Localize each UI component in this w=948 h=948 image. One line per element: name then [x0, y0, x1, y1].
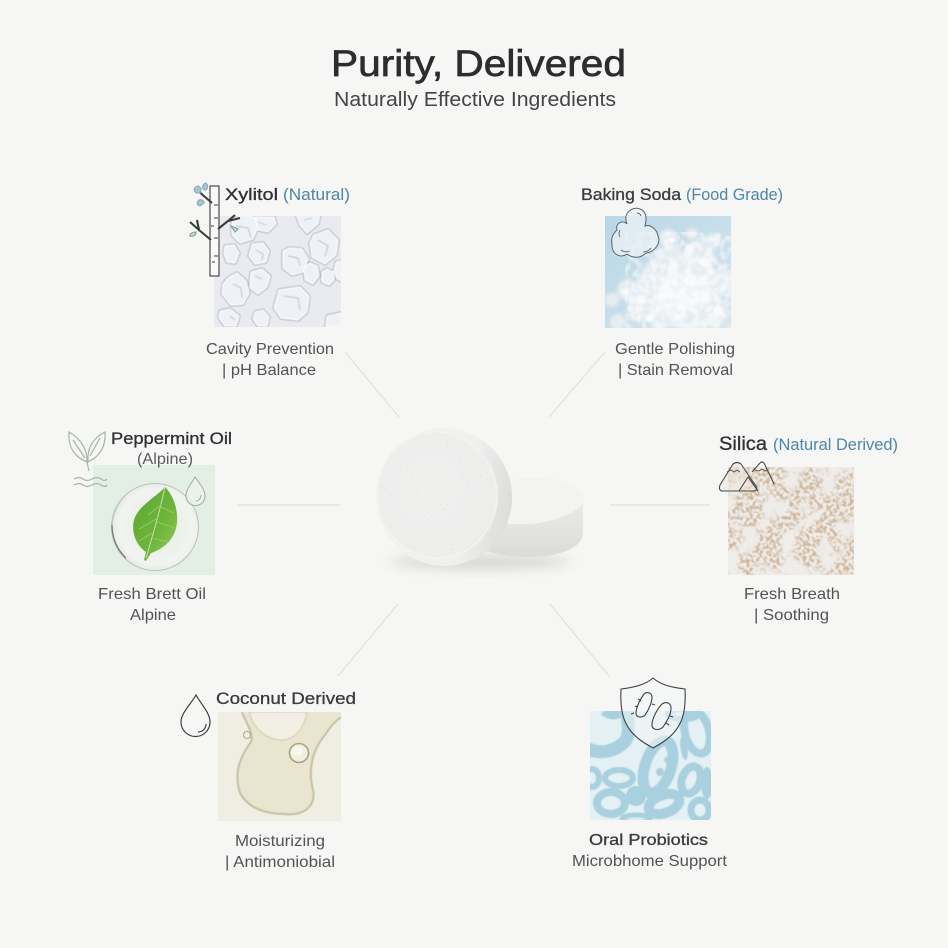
heading: baking soda: (Food Grade) [686, 185, 783, 204]
caption: oral probiotics: Oral Probiotics [589, 832, 708, 849]
caption: oral probiotics [572, 832, 728, 870]
caption: baking soda: | Stain Removal [618, 362, 733, 379]
panel: coconut derived [181, 689, 356, 871]
image: xylitol crystals [214, 214, 342, 327]
title: Purity, Delivered [331, 43, 626, 84]
heading: peppermint oil: (Alpine) [137, 451, 193, 468]
icon: oil droplet [186, 477, 205, 506]
heading: baking soda [581, 185, 783, 204]
icon: powder cloud [612, 208, 659, 257]
caption: xylitol [206, 341, 334, 379]
caption: xylitol: | pH Balance [222, 362, 316, 379]
heading: peppermint oil: Peppermint Oil [111, 429, 232, 448]
heading: xylitol: (Natural) [283, 185, 350, 204]
heading: xylitol: Xylitol [225, 185, 278, 204]
subtitle: Naturally Effective Ingredients [334, 89, 616, 111]
caption: coconut derived: | Antimoniobial [225, 854, 335, 871]
image: mint leaf in oil drop [93, 465, 215, 575]
image: microbiome cells [590, 711, 711, 820]
icon: mint sprout and waves [69, 432, 107, 486]
heading: silica: (Natural Derived) [773, 435, 898, 454]
heading: coconut derived: Coconut Derived [216, 689, 356, 708]
icon: drop [181, 695, 210, 736]
panel: xylitol [190, 183, 350, 379]
caption: silica: Fresh Breath [744, 586, 840, 603]
caption: silica [744, 586, 840, 624]
panel: baking soda [581, 185, 783, 379]
caption: xylitol: Cavity Prevention [206, 341, 334, 358]
image: silica granules [728, 467, 854, 575]
caption: oral probiotics: Microbhome Support [572, 853, 728, 870]
icon: shield with bacteria [621, 678, 685, 748]
heading: peppermint oil [111, 429, 232, 468]
panel: oral probiotics [572, 678, 728, 870]
heading: silica [719, 434, 898, 455]
image: baking soda powder [605, 216, 735, 333]
caption: coconut derived: Moisturizing [235, 833, 325, 850]
panel: silica [719, 434, 898, 624]
icon: birch branch [190, 183, 240, 276]
caption: coconut derived [225, 833, 335, 871]
back tablet [469, 474, 585, 557]
caption: baking soda: Gentle Polishing [615, 341, 735, 358]
caption: silica: | Soothing [754, 607, 829, 624]
front tablet [378, 432, 512, 566]
heading: silica: Silica [719, 434, 767, 455]
connector lines [237, 352, 710, 676]
panel: peppermint oil [69, 429, 232, 624]
heading: xylitol [225, 185, 350, 204]
icon: mountains [719, 462, 774, 491]
caption: peppermint oil: Fresh Brett Oil [98, 586, 206, 603]
heading: baking soda: Baking Soda [581, 185, 682, 204]
caption: peppermint oil [98, 586, 206, 624]
caption: baking soda [615, 341, 735, 379]
central tablets [378, 432, 583, 572]
image: coconut oil serum [218, 712, 342, 821]
caption: peppermint oil: Alpine [130, 607, 176, 624]
